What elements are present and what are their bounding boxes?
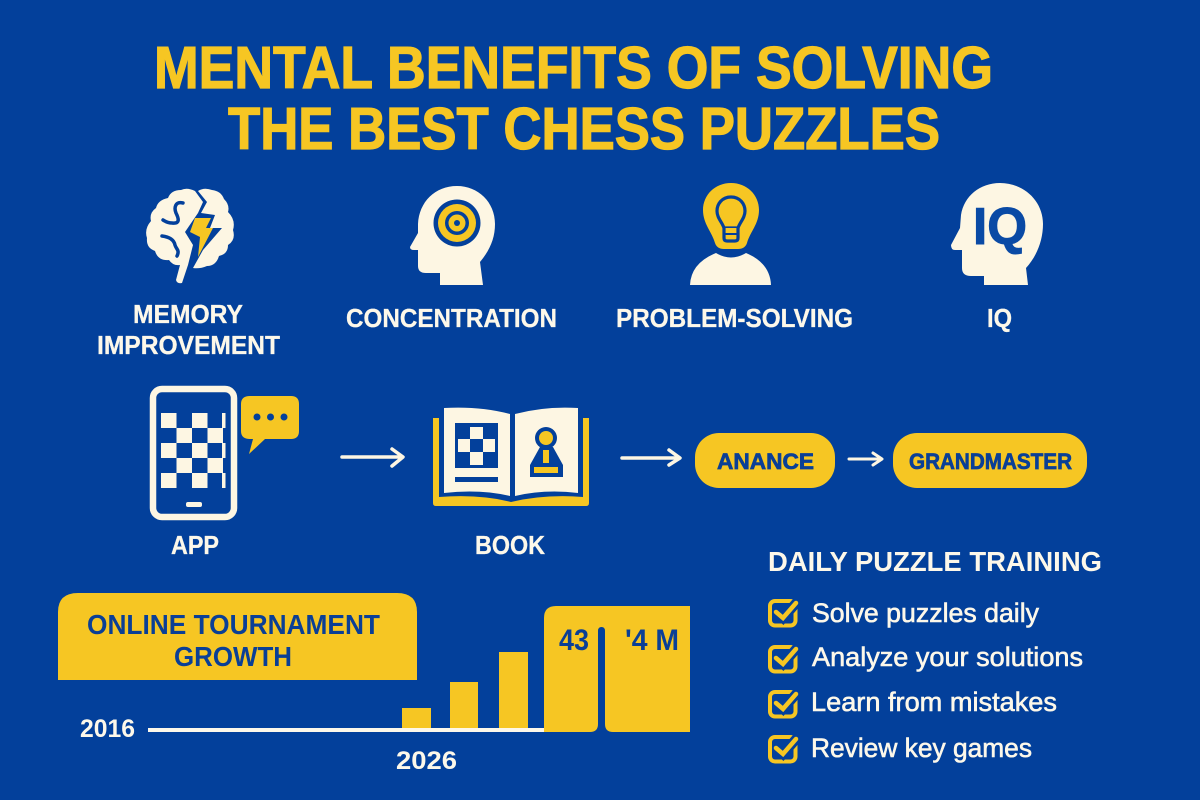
heading: daily puzzle training: DAILY PUZZLE TRAINING	[768, 546, 1102, 577]
panel: book	[433, 408, 589, 560]
panel: app	[153, 389, 299, 560]
checklist item: solve puzzles daily: Solve puzzles daily	[812, 598, 1039, 628]
banner: online tournament growth	[58, 593, 417, 680]
title	[154, 35, 993, 162]
checklist item: review key games: Review key games	[811, 733, 1032, 763]
title: MENTAL BENEFITS OF SOLVING	[154, 35, 993, 101]
banner: online tournament growth: ONLINE TOURNAMENT	[87, 609, 380, 640]
title: THE BEST CHESS PUZZLES	[228, 96, 940, 162]
label: problem-solving: PROBLEM-SOLVING	[616, 303, 853, 333]
label: concentration: CONCENTRATION	[346, 303, 557, 333]
checklist item: analyze your solutions: Analyze your solutions	[812, 642, 1083, 672]
panel: online tournament growth	[58, 593, 690, 775]
pill: anance	[695, 433, 835, 488]
icon: head with IQ: IQ	[973, 198, 1027, 256]
bar chart	[148, 606, 690, 732]
icon: open book	[433, 408, 589, 506]
icon: person with light bulb	[690, 183, 771, 285]
icon: head with target	[410, 186, 495, 285]
label: end year: 2026	[396, 747, 457, 775]
panel: daily puzzle training	[768, 546, 1102, 763]
pill: anance: ANANCE	[717, 449, 814, 474]
label: start year: 2016	[80, 715, 135, 743]
arrow: app to book	[342, 449, 403, 466]
bar chart: 43	[559, 624, 589, 657]
icon: head with IQ	[951, 183, 1043, 285]
arrow: advance to grandmaster	[849, 453, 882, 465]
label: iq: IQ	[987, 303, 1012, 333]
arrow: book to advance	[622, 450, 680, 465]
label: memory improvement	[97, 299, 280, 360]
label: app: APP	[171, 530, 219, 560]
label: book: BOOK	[475, 530, 545, 560]
panel: problem-solving	[616, 183, 853, 333]
label: memory improvement: IMPROVEMENT	[97, 330, 280, 360]
banner: online tournament growth: GROWTH	[174, 641, 292, 672]
icon: speech bubble	[241, 396, 299, 454]
panel: memory improvement	[97, 189, 280, 360]
pill: grandmaster	[893, 433, 1087, 488]
bar chart: '4 M	[625, 624, 679, 657]
icon: brain with lightning bolt	[146, 189, 234, 283]
checklist item: learn from mistakes: Learn from mistakes	[811, 687, 1057, 717]
icon: phone with chessboard	[153, 389, 234, 517]
label: memory improvement: MEMORY	[133, 299, 243, 329]
panel: concentration	[346, 186, 557, 333]
pill: grandmaster: GRANDMASTER	[909, 449, 1072, 474]
panel: iq	[951, 183, 1043, 333]
